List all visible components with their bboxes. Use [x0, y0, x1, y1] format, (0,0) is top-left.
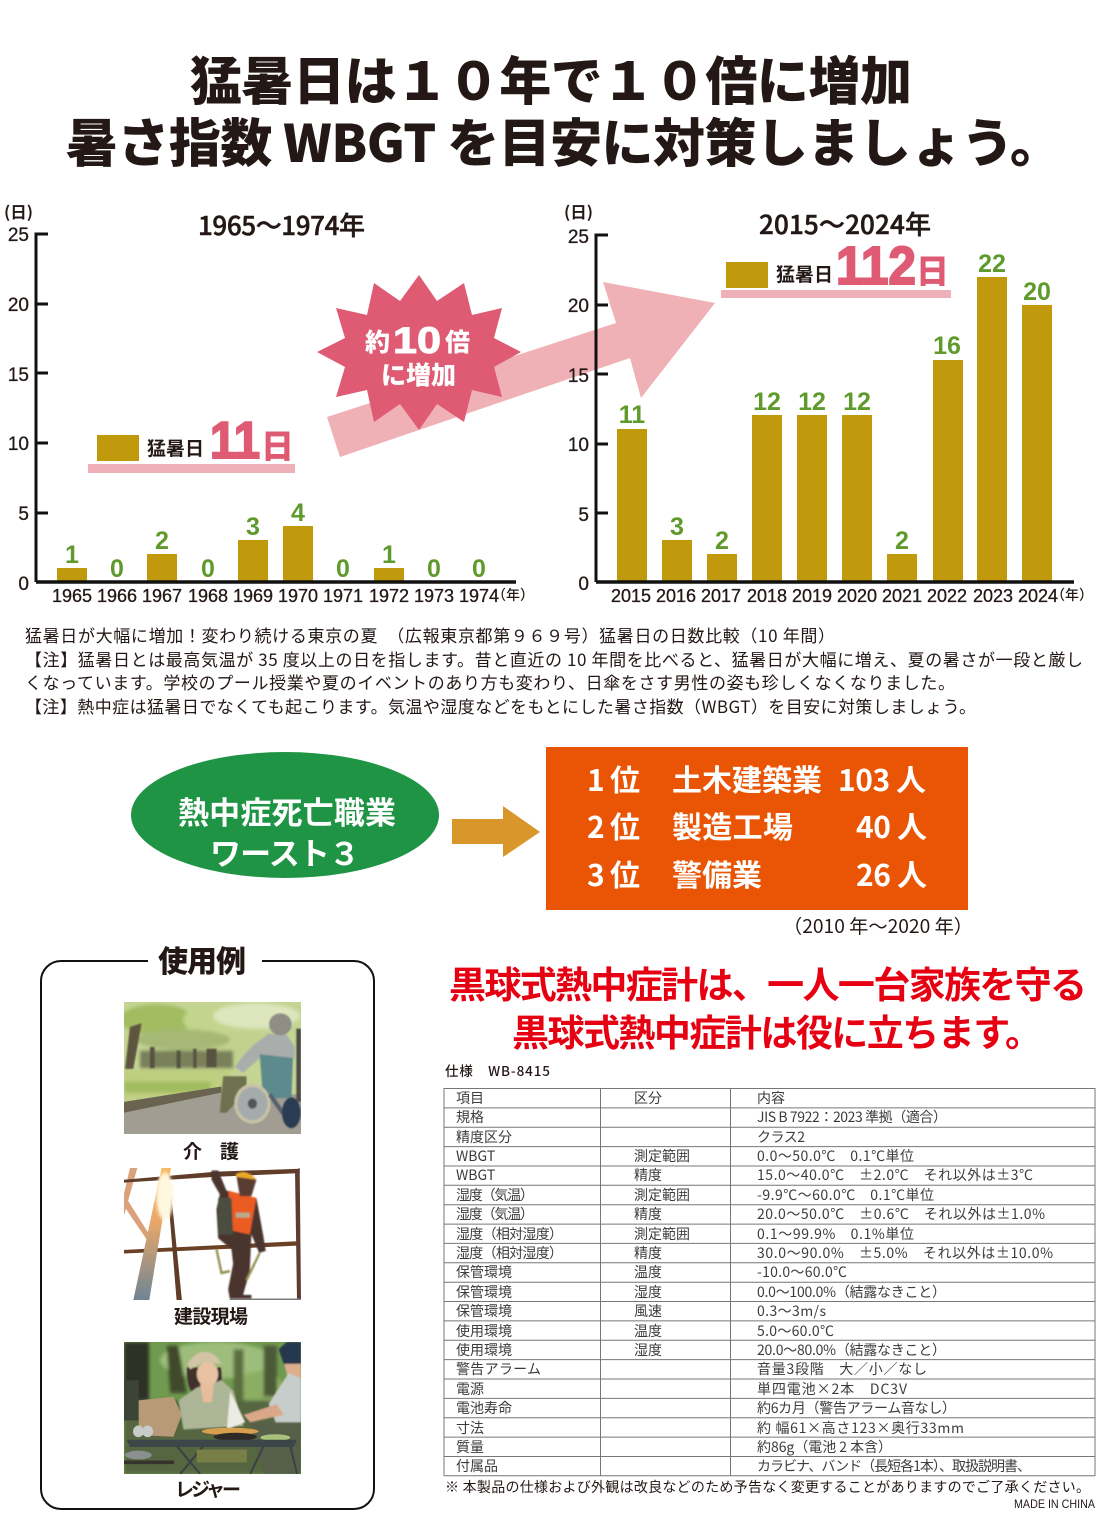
caption: construction site: 建設現場: [174, 1302, 248, 1329]
table text: 20.0～80.0%（結露なきこと）: [757, 1340, 946, 1360]
table text: 保管環境: [456, 1301, 512, 1321]
table text: カラビナ、バンド（長短各1本）、取扱説明書、: [757, 1456, 1031, 1476]
y axis: 5: [578, 505, 589, 526]
year labels: 2021: [882, 586, 922, 606]
y axis: 25: [8, 225, 29, 246]
year labels: 1968: [188, 586, 228, 606]
table text: [456, 1088, 1053, 1476]
value labels: 12: [843, 388, 871, 416]
y axis: 25: [568, 227, 589, 248]
table text: 測定範囲: [634, 1185, 690, 1205]
table text: 電源: [456, 1379, 484, 1399]
table text: WBGT: [456, 1146, 495, 1166]
ranking box: 1 位: [587, 756, 640, 800]
table text: 0.0～100.0%（結露なきこと）: [757, 1282, 946, 1302]
year labels: 1974: [459, 586, 499, 606]
table text: -10.0～60.0℃: [757, 1262, 847, 1282]
table text: 使用環境: [456, 1321, 512, 1341]
year labels: （年）: [492, 585, 534, 605]
value labels: 2: [715, 527, 729, 555]
value labels: 1: [65, 541, 79, 569]
caption: nursing care: 介 護: [183, 1137, 239, 1164]
value labels: 1: [382, 541, 396, 569]
year labels: 2019: [792, 586, 832, 606]
legend: 11 days: 日: [261, 420, 294, 468]
legend: 112 days: 112: [836, 236, 916, 296]
table text: 精度: [634, 1243, 662, 1263]
table text: JIS B 7922：2023 準拠（適合）: [757, 1107, 947, 1127]
year labels: 2015: [611, 586, 651, 606]
year labels: 1967: [142, 586, 182, 606]
value labels: 12: [798, 388, 826, 416]
legend: 112 days: [721, 236, 951, 298]
table text: 15.0～40.0℃ ±2.0℃ それ以外は±3℃: [757, 1165, 1033, 1185]
ranking box: 土木建築業: [672, 756, 822, 800]
starburst callout: [317, 275, 521, 430]
year labels: 2020: [837, 586, 877, 606]
year labels: 2022: [927, 586, 967, 606]
year labels: 1970: [278, 586, 318, 606]
panel: usage examples: [41, 937, 374, 1509]
table text: 0.1～99.9% 0.1%単位: [757, 1224, 914, 1244]
bars: [57, 526, 404, 582]
legend: 112 days: 日: [916, 245, 949, 293]
table text: 使用環境: [456, 1340, 512, 1360]
disclaimer: ※ 本製品の仕様および外観は改良などのため予告なく変更することがありますのでご了承ください。: [445, 1477, 1090, 1497]
table text: クラス2: [757, 1127, 805, 1147]
value labels: 2: [155, 527, 169, 555]
table text: 測定範囲: [634, 1146, 690, 1166]
y axis: [8, 225, 48, 595]
legend: 11 days: 猛暑日: [147, 434, 204, 461]
explanatory text: 【注】猛暑日とは最高気温が 35 度以上の日を指します。昔と直近の 10 年間を比べると、猛暑日が大幅に増え、夏の暑さが一段と厳し: [25, 646, 1083, 671]
value labels: 22: [978, 250, 1006, 278]
green ellipse: worst 3 occupations: ワースト３: [210, 829, 360, 874]
worker: [212, 1171, 266, 1299]
y axis: 15: [8, 365, 29, 386]
green ellipse: worst 3 occupations: 熱中症死亡職業: [178, 788, 396, 833]
title: 暑さ指数 WBGT を目安に対策しましょう。: [66, 102, 1062, 177]
table text: 湿度（気温）: [456, 1185, 534, 1205]
table text: 精度: [634, 1165, 662, 1185]
arrow to ranking: [452, 806, 540, 857]
chart title: 2015-2024: 2015～2024年: [759, 205, 931, 242]
chart title: 1965-1974: 1965～1974年: [198, 206, 365, 243]
value labels: 0: [472, 555, 486, 583]
table text: 湿度: [634, 1282, 662, 1302]
photo: leisure camping picnic: [124, 1342, 301, 1474]
table text: 精度: [634, 1204, 662, 1224]
panel heading: 使用例: [158, 937, 246, 981]
title: [66, 40, 1062, 177]
value labels: 11: [619, 401, 645, 429]
year labels: （年）: [1051, 585, 1093, 605]
ranking box: 2 位: [587, 803, 640, 847]
year labels: 1971: [323, 586, 363, 606]
man: [244, 1342, 301, 1474]
table text: 温度: [634, 1262, 662, 1282]
year labels: 1972: [369, 586, 409, 606]
y axis: 20: [568, 296, 589, 317]
chart: 1965-1974: (日): [4, 199, 33, 223]
value labels: 12: [753, 388, 781, 416]
table text: 20.0～50.0℃ ±0.6℃ それ以外は±1.0%: [757, 1204, 1045, 1224]
table text: WBGT: [456, 1165, 495, 1185]
table text: 保管環境: [456, 1262, 512, 1282]
period note: （2010 年～2020 年）: [783, 912, 973, 939]
table text: 0.0～50.0℃ 0.1℃単位: [757, 1146, 914, 1166]
table text: 項目: [456, 1088, 484, 1108]
photo: construction worker: [124, 1168, 301, 1300]
ranking box: [546, 747, 968, 910]
ranking box: 103 人: [838, 756, 926, 800]
table text: 約 幅61×高さ123×奥行33mm: [757, 1418, 964, 1438]
year labels: 2023: [973, 586, 1013, 606]
starburst callout: に増加: [381, 356, 456, 392]
y axis: 10: [568, 435, 589, 456]
red headline: [449, 955, 1087, 1057]
year labels: [611, 585, 1093, 606]
table text: 湿度（相対湿度）: [456, 1224, 563, 1244]
legend: 11 days: 11: [210, 412, 260, 470]
table text: 単四電池×2本 DC3V: [757, 1379, 908, 1399]
table text: 風速: [634, 1301, 662, 1321]
table text: 区分: [634, 1088, 662, 1108]
red headline: 黒球式熱中症計は、一人一台家族を守る: [449, 955, 1087, 1009]
chart: 1965-1974: [4, 199, 534, 606]
table text: 精度区分: [456, 1127, 512, 1147]
table text: 音量3段階 大／小／なし: [757, 1359, 927, 1379]
table text: 保管環境: [456, 1282, 512, 1302]
table text: 30.0～90.0% ±5.0% それ以外は±10.0%: [757, 1243, 1053, 1263]
year labels: 2018: [747, 586, 787, 606]
table text: 湿度（気温）: [456, 1204, 534, 1224]
starburst callout: 10: [393, 320, 441, 361]
value labels: 3: [246, 513, 260, 541]
photo: nursing care wheelchair in park: [124, 1002, 301, 1134]
value labels: 3: [670, 513, 684, 541]
table text: 湿度（相対湿度）: [456, 1243, 563, 1263]
year labels: 2017: [701, 586, 741, 606]
legend: 11 days: [88, 412, 295, 473]
explanatory text: 【注】熱中症は猛暑日でなくても起こります。気温や湿度などをもとにした暑さ指数（WBGT）を目安に対策しましょう。: [25, 693, 976, 718]
value labels: 2: [895, 527, 909, 555]
table text: 約86g（電池 2 本含）: [757, 1437, 892, 1457]
table text: 電池寿命: [456, 1398, 512, 1418]
table text: 付属品: [456, 1456, 498, 1476]
value labels: 0: [336, 555, 350, 583]
value labels: 0: [110, 555, 124, 583]
ranking box: 警備業: [672, 851, 762, 895]
table text: 0.3～3m/s: [757, 1301, 826, 1321]
spec table: [444, 1088, 1095, 1476]
y axis: 20: [8, 295, 29, 316]
picnic table: [124, 1428, 297, 1474]
year labels: 1965: [52, 586, 92, 606]
table text: 規格: [456, 1107, 484, 1127]
table text: 5.0～60.0℃: [757, 1321, 834, 1341]
table text: 温度: [634, 1321, 662, 1341]
bars: [617, 277, 1052, 582]
y axis: 15: [568, 366, 589, 387]
green ellipse: worst 3 occupations: [131, 752, 439, 878]
chart: 2015-2024: (日): [564, 199, 593, 223]
red headline: 黒球式熱中症計は役に立ちます。: [512, 1003, 1042, 1057]
year labels: 1966: [97, 586, 137, 606]
year labels: 1973: [414, 586, 454, 606]
value labels: 4: [291, 499, 305, 527]
table text: 内容: [757, 1088, 785, 1108]
arrow between charts: [327, 282, 715, 457]
table text: 湿度: [634, 1340, 662, 1360]
table text: 測定範囲: [634, 1224, 690, 1244]
explanatory text: 猛暑日が大幅に増加！変わり続ける東京の夏 （広報東京都第９６９号）猛暑日の日数比較（10 年間）: [25, 622, 835, 647]
table text: -9.9℃～60.0℃ 0.1℃単位: [757, 1185, 934, 1205]
value labels: 0: [201, 555, 215, 583]
starburst callout: 倍: [445, 323, 470, 359]
value labels: 16: [933, 332, 961, 360]
value labels: 0: [427, 555, 441, 583]
spec heading: 仕様 WB-8415: [445, 1060, 550, 1080]
value labels: 20: [1023, 278, 1051, 306]
table text: 約6カ月（警告アラーム音なし）: [757, 1398, 956, 1418]
explanatory text: くなっています。学校のプール授業や夏のイベントのあり方も変わり、日傘をさす男性の姿も珍しくなくなりました。: [25, 669, 955, 694]
ranking box: 26 人: [856, 851, 927, 895]
chart: 2015-2024: [564, 199, 1093, 606]
y axis: 0: [18, 574, 29, 595]
starburst callout: 約: [365, 323, 390, 359]
year labels: 2024: [1018, 586, 1058, 606]
table text: 寸法: [456, 1418, 484, 1438]
table grid: [444, 1088, 1095, 1476]
title: 猛暑日は１０年で１０倍に増加: [190, 40, 912, 115]
ranking box: 40 人: [856, 803, 927, 847]
woman: [178, 1352, 245, 1430]
explanatory text: [25, 622, 1083, 718]
caption: leisure: レジャー: [175, 1475, 241, 1502]
ranking box: 3 位: [587, 851, 640, 895]
ranking box: 製造工場: [672, 803, 793, 847]
y axis: [568, 227, 608, 595]
year labels: 1969: [233, 586, 273, 606]
wheelchair user: [220, 1013, 301, 1128]
legend: 112 days: 猛暑日: [776, 260, 833, 287]
y axis: 10: [8, 434, 29, 455]
table text: 質量: [456, 1437, 484, 1457]
year labels: [52, 585, 534, 606]
value labels: [619, 250, 1051, 555]
y axis: 0: [578, 574, 589, 595]
value labels: [65, 499, 486, 583]
y axis: 5: [18, 504, 29, 525]
year labels: 2016: [656, 586, 696, 606]
table text: 警告アラーム: [456, 1359, 541, 1379]
